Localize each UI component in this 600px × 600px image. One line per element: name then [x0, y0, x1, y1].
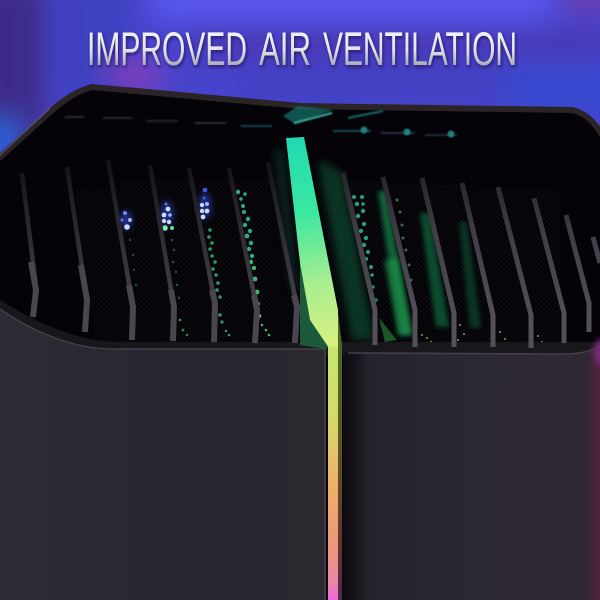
- title: IMPROVED: [87, 22, 247, 75]
- left panel edge highlight: [0, 309, 325, 600]
- lower right purple glow: [594, 338, 600, 366]
- lower left body panel: [0, 309, 326, 600]
- title: [87, 22, 517, 75]
- green glow behind right vents: [274, 150, 481, 340]
- interior reflections: [65, 106, 457, 138]
- title: AIR: [259, 22, 311, 75]
- lower right body panel: [343, 345, 600, 600]
- blurred blue and purple background: [0, 0, 600, 200]
- RGB light strip: [286, 137, 342, 600]
- lit mesh dots, blue and green: [120, 188, 543, 343]
- metal mesh behind vents: [75, 180, 560, 345]
- lower vent lip: [0, 300, 600, 356]
- top bezel: [0, 87, 600, 159]
- right panel edge highlight: [348, 345, 600, 354]
- case interior: [0, 85, 600, 360]
- vent fins: [22, 160, 600, 348]
